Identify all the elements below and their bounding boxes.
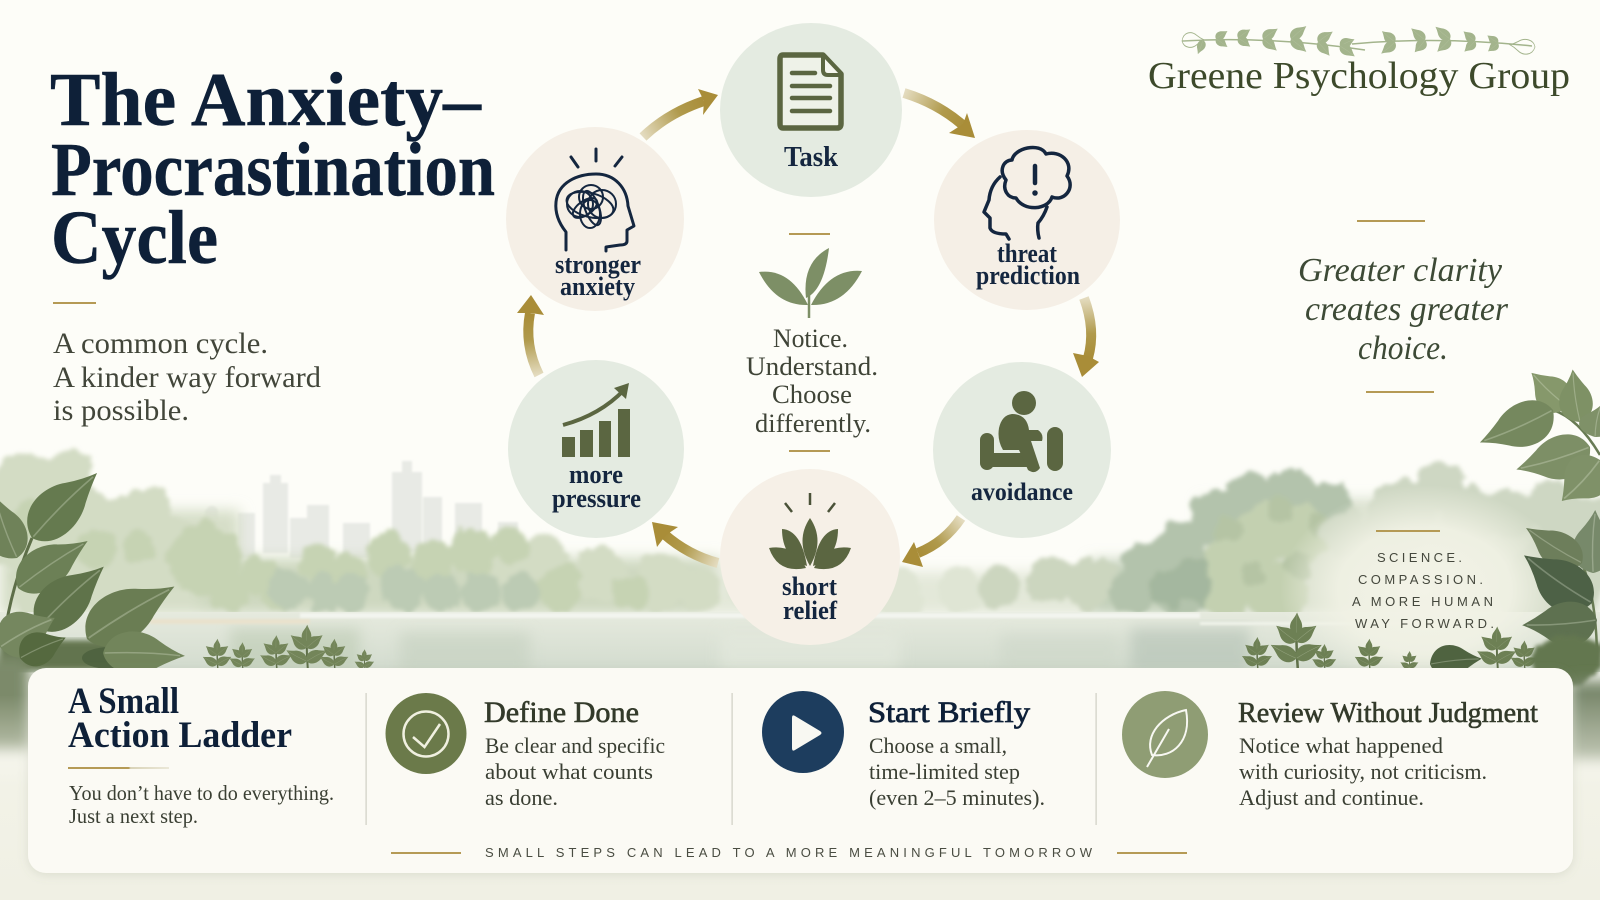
node: threat prediction [934, 130, 1120, 310]
step: review without judgment [1122, 691, 1538, 810]
label [976, 239, 1080, 290]
arrow: task to threat prediction [904, 93, 975, 138]
node: more pressure [508, 360, 684, 538]
subtitle: A common cycle. [53, 327, 268, 360]
label: pressure [552, 484, 641, 513]
panel footer strapline: SMALL STEPS CAN LEAD TO A MORE MEANINGFUL TOMORROW [485, 845, 1093, 860]
tagline: science compassion [1352, 530, 1494, 631]
icon: person on sofa [980, 391, 1063, 472]
title: Cycle [51, 196, 218, 280]
center message [746, 233, 878, 452]
label [782, 572, 837, 625]
panel heading [68, 681, 292, 756]
hazy band behind trees [0, 500, 1600, 615]
step: start briefly: Start Briefly [868, 696, 1030, 729]
node: short relief [720, 469, 900, 645]
arrow: avoidance to short relief [902, 518, 961, 567]
cycle diagram [506, 23, 1120, 645]
step: start briefly: time-limited step [869, 759, 1020, 784]
step: start briefly: (even 2–5 minutes). [869, 785, 1045, 810]
quote: greater clarity: Greater clarity [1298, 252, 1503, 289]
arrow: more pressure to stronger anxiety [517, 295, 544, 375]
step: review without judgment: Review Without Judgment [1238, 697, 1538, 729]
step: define done: about what counts [485, 759, 653, 784]
label: anxiety [560, 272, 635, 301]
label: stronger [555, 250, 641, 279]
arrow: short relief to more pressure [652, 522, 718, 563]
subtitle: A kinder way forward [53, 361, 321, 394]
node: task [720, 23, 902, 197]
icon: head with warning cloud [984, 147, 1070, 239]
small plants right [1240, 612, 1539, 678]
icon: sprout [759, 248, 862, 318]
panel: small action ladder [28, 668, 1573, 873]
tagline: science compassion: WAY FORWARD. [1355, 616, 1494, 631]
panel heading: Action Ladder [68, 715, 292, 756]
label: threat [997, 239, 1057, 268]
center message: Choose [772, 380, 852, 409]
step: define done: as done. [485, 785, 558, 810]
background: misty lake landscape [0, 450, 1600, 695]
panel heading: A Small [68, 681, 179, 722]
center message: differently. [755, 409, 871, 438]
icon: head with tangled thoughts [556, 149, 634, 251]
step: review without judgment: with curiosity, not criticism. [1239, 759, 1487, 784]
lake highlights [150, 613, 1420, 625]
tagline: science compassion: SCIENCE. [1377, 550, 1462, 565]
panel intro: You don’t have to do everything. [69, 781, 334, 805]
arrow: threat prediction to avoidance [1073, 298, 1099, 377]
title [50, 58, 495, 280]
foliage: left leaves [0, 455, 186, 750]
step: define done: Define Done [484, 696, 639, 729]
label: Task [784, 142, 838, 173]
icon: rising bars [562, 383, 630, 457]
label: avoidance [971, 479, 1073, 506]
center message: Notice. [773, 324, 848, 353]
label [552, 460, 641, 513]
subtitle: is possible. [53, 394, 189, 427]
step: review without judgment: Notice what happened [1239, 733, 1443, 758]
step: review without judgment: Adjust and continue. [1239, 785, 1424, 810]
logo: brand name: Greene Psychology Group [1148, 55, 1570, 97]
label: more [569, 460, 623, 489]
label: short [782, 572, 837, 601]
icon: play [762, 691, 844, 773]
node: avoidance [933, 362, 1111, 538]
tagline: science compassion: COMPASSION. [1358, 572, 1483, 587]
title: The Anxiety– [50, 58, 482, 142]
lake reflections [230, 628, 1250, 672]
panel intro: Just a next step. [69, 804, 198, 828]
tagline: science compassion: A MORE HUMAN [1352, 594, 1493, 609]
arrow: stronger anxiety to task [643, 89, 718, 137]
logo: laurel [1182, 22, 1536, 60]
step: start briefly: Choose a small, [869, 733, 1007, 758]
label [555, 250, 641, 301]
node: stronger anxiety [506, 127, 684, 311]
quote: greater clarity: choice. [1358, 330, 1448, 367]
foliage: right leaves [1472, 361, 1600, 760]
small plants left [201, 625, 375, 672]
label: prediction [976, 261, 1080, 290]
step: start briefly [762, 691, 1045, 810]
panel intro [69, 781, 334, 828]
title rule [53, 302, 96, 304]
center message: Understand. [746, 352, 878, 381]
step: define done [386, 693, 665, 810]
icon: document [780, 55, 841, 128]
lake [0, 612, 1600, 672]
label: relief [783, 596, 837, 625]
icon: leaf [1122, 691, 1208, 778]
icon: lotus [769, 493, 851, 569]
tree line [0, 450, 1600, 638]
subtitle [53, 327, 321, 427]
quote: greater clarity: creates greater [1305, 291, 1509, 328]
icon: check [386, 693, 466, 774]
quote: greater clarity [1298, 220, 1509, 393]
fog patch [1280, 485, 1570, 695]
bottom ground fade [0, 695, 1600, 900]
city skyline [205, 461, 518, 558]
step: define done: Be clear and specific [485, 733, 665, 758]
title: Procrastination [51, 128, 495, 212]
